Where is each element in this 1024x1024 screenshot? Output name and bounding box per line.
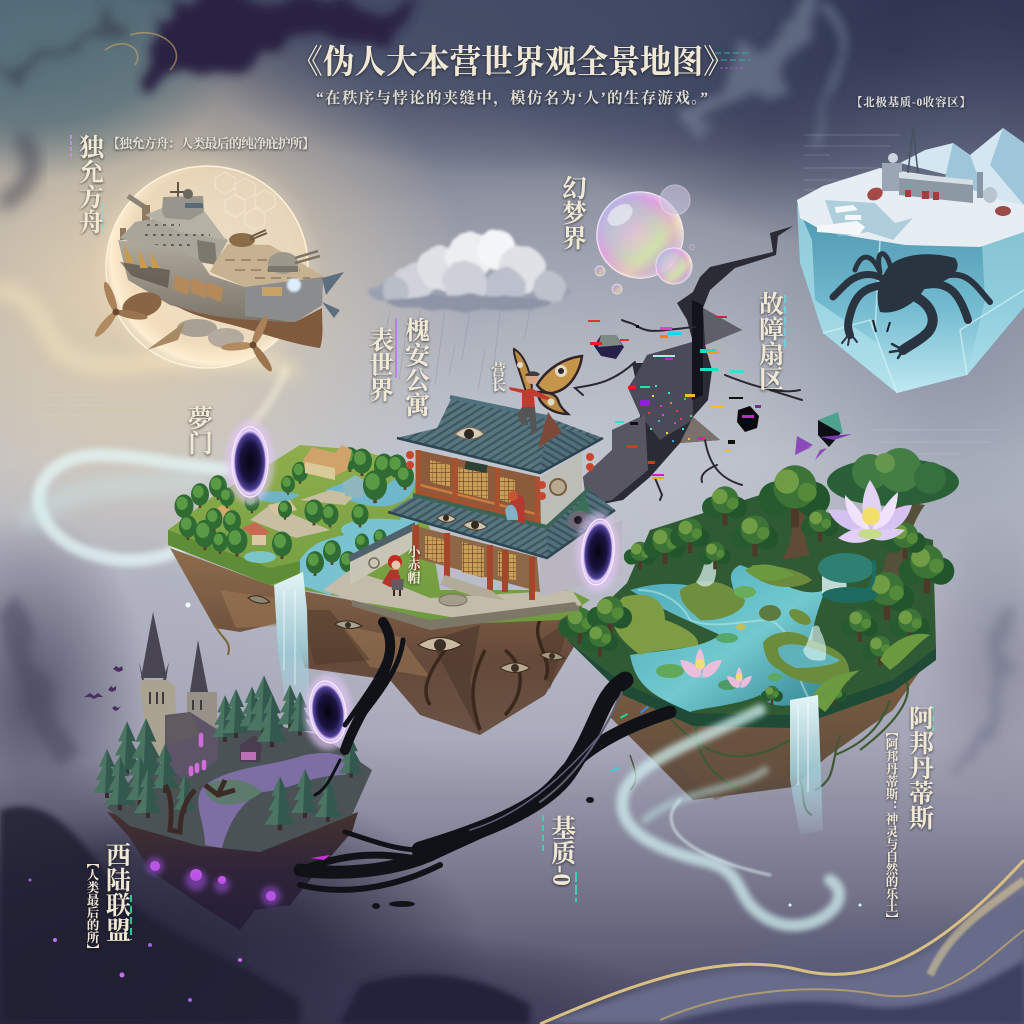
upper front wall — [418, 450, 541, 530]
lower roof eyes — [437, 515, 456, 522]
sparkles — [28, 602, 862, 1002]
turret — [268, 252, 298, 274]
label: camp leader: 营长 — [489, 361, 506, 393]
label: surface world: 表世界 — [366, 327, 394, 402]
lily leaf big — [818, 553, 874, 583]
iridescent bubbles — [595, 185, 694, 294]
main island rock with eyes — [170, 548, 582, 735]
keel — [175, 305, 322, 348]
faint data text lines — [40, 135, 1000, 454]
waterfall of jungle — [790, 695, 823, 835]
glitch crack — [575, 226, 852, 507]
dormer eye creature — [565, 495, 590, 530]
research base — [908, 127, 918, 173]
figure on balcony — [510, 494, 525, 524]
polar ice island — [797, 127, 1024, 393]
apartment building — [388, 397, 622, 600]
label: dream gate: 夢门 — [184, 405, 213, 455]
main hull — [118, 240, 323, 322]
church — [141, 612, 167, 678]
lower roof — [388, 490, 615, 558]
steps — [440, 575, 505, 600]
label: little red hood: 小赤帽 — [406, 545, 420, 585]
snow top — [797, 168, 1024, 247]
glitch pixels — [588, 316, 761, 479]
long boundary wall — [350, 525, 418, 585]
airship ark with dome — [77, 159, 344, 375]
glowing eyes — [150, 861, 276, 901]
right island surface — [558, 448, 959, 728]
lanterns — [406, 451, 594, 500]
label: huaian apartment: 槐安公寓 — [402, 316, 430, 417]
courtyard stone — [323, 570, 582, 622]
small lotuses — [680, 648, 752, 688]
pines — [212, 695, 238, 742]
portal: west — [304, 674, 352, 750]
surface — [107, 722, 372, 852]
label: matrix zero: 基质-0 — [548, 815, 576, 886]
spirits — [696, 554, 716, 586]
cloud with rain — [368, 230, 572, 405]
energy dome — [106, 166, 308, 368]
jungle land patches — [613, 595, 698, 655]
jungle water — [630, 565, 830, 712]
rock eyes — [418, 638, 462, 651]
ferns — [745, 565, 930, 712]
floating debris — [594, 335, 624, 359]
frozen creature — [833, 254, 990, 358]
lower right wall — [540, 520, 622, 597]
label: abundantis description: 【阿邦丹蒂斯：神灵与自然的乐土】 — [884, 725, 898, 925]
label: west alliance: 西陆联盟 — [102, 842, 131, 942]
upper roof — [397, 397, 603, 473]
label: abundantis: 阿邦丹蒂斯 — [906, 705, 934, 830]
label: polar zone: 【北极基质-0收容区】 — [851, 95, 971, 109]
black drips — [372, 797, 594, 909]
label: glitch sector: 故障扇区 — [756, 291, 784, 391]
tendril glitch marks — [310, 706, 649, 860]
right island rock — [610, 648, 936, 815]
fountain medallion — [439, 594, 467, 606]
matrix-0 black tendrils — [300, 622, 670, 890]
red hood girl — [382, 555, 404, 596]
butterfly captain figure — [509, 349, 582, 435]
lily pads — [734, 586, 756, 598]
plot paths — [250, 490, 355, 538]
subtitle: “在秩序与悖论的夹缝中，模仿名为‘人’的生存游戏。” — [316, 88, 708, 108]
main waterfall — [274, 572, 310, 720]
label: dream realm: 幻梦界 — [558, 175, 587, 250]
label: ark name: 独允方舟 — [76, 134, 104, 234]
bats — [84, 666, 123, 711]
superstructure — [120, 214, 228, 264]
portal: dream gate left — [226, 420, 274, 504]
west island — [84, 612, 372, 930]
small jungle waterfall — [822, 553, 847, 596]
upper right wall — [540, 452, 582, 530]
water mist spirit right — [622, 710, 839, 925]
garden trees — [174, 494, 194, 520]
engines and propellers — [120, 288, 164, 322]
garden trees back — [292, 462, 308, 484]
warm wisps — [0, 290, 290, 560]
underside — [107, 812, 358, 930]
giant lotus — [828, 480, 912, 543]
label: west description: 【人类最后的所】 — [85, 856, 99, 956]
main island surface: garden — [168, 445, 590, 630]
smoke purple top — [0, 0, 1024, 780]
houses — [303, 445, 352, 478]
deck — [210, 244, 325, 287]
giant trees — [782, 495, 810, 560]
jungle foliage left — [558, 607, 601, 644]
title: 《伪人大本营世界观全景地图》 — [291, 44, 735, 81]
lower front wall — [412, 525, 540, 592]
roof eye — [455, 428, 484, 439]
rear guns and mast — [170, 182, 190, 210]
ice block — [797, 200, 1024, 393]
label: ark description: 【独允方舟：人类最后的纯净庇护所】 — [107, 136, 315, 151]
portal: apartment — [576, 512, 620, 592]
river — [300, 495, 420, 595]
crack branches — [575, 320, 802, 500]
label glitch bars — [71, 53, 933, 940]
bottom swirls — [0, 806, 1024, 1024]
dead tree — [165, 780, 235, 832]
mountains — [900, 128, 1024, 205]
